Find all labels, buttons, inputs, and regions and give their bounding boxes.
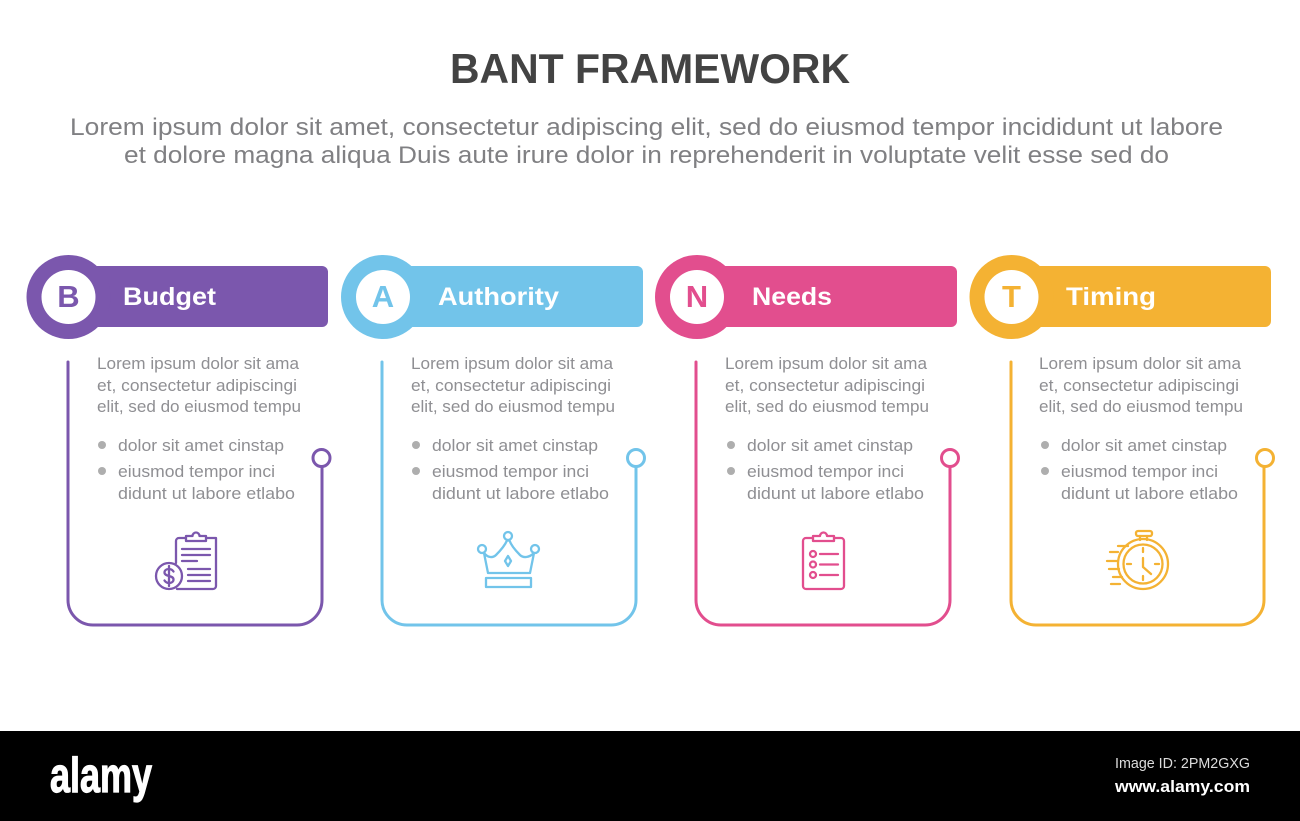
needs header bbox=[655, 255, 957, 339]
website: www.alamy.com bbox=[1114, 778, 1250, 796]
footer: watermark bar bbox=[0, 731, 1300, 821]
budget description: et, consectetur adipiscingi bbox=[97, 377, 297, 395]
needs description bbox=[725, 355, 929, 416]
timing header bbox=[970, 255, 1271, 339]
timing outline with end marker bbox=[1011, 362, 1274, 625]
timing bullet list: dolor sit amet cinstap bbox=[1061, 437, 1227, 455]
icon: clipboard with dollar coin bbox=[156, 533, 216, 589]
authority description bbox=[411, 355, 615, 416]
authority header bbox=[341, 255, 643, 339]
timing description: et, consectetur adipiscingi bbox=[1039, 377, 1239, 395]
authority bullet list bbox=[412, 437, 609, 503]
needs header: Needs bbox=[752, 283, 832, 311]
needs bullet list bbox=[727, 437, 924, 503]
icon: checklist clipboard bbox=[803, 533, 844, 589]
needs outline with end marker bbox=[696, 362, 958, 625]
title: BANT FRAMEWORK bbox=[450, 45, 850, 92]
budget header: Budget bbox=[123, 283, 217, 311]
budget bullet list bbox=[98, 437, 295, 503]
timing header: Timing bbox=[1066, 283, 1156, 311]
subtitle text block bbox=[70, 114, 1223, 169]
budget header: B bbox=[57, 279, 80, 314]
needs bullet list: dolor sit amet cinstap bbox=[747, 437, 913, 455]
timing bullet list bbox=[1041, 437, 1238, 503]
budget description: Lorem ipsum dolor sit ama bbox=[97, 355, 300, 373]
needs header: N bbox=[686, 279, 708, 314]
authority header: Authority bbox=[438, 283, 559, 311]
timing bullet list: didunt ut labore etlabo bbox=[1061, 485, 1238, 503]
panel: authority bbox=[341, 255, 644, 625]
authority bullet list: dolor sit amet cinstap bbox=[432, 437, 598, 455]
needs description: et, consectetur adipiscingi bbox=[725, 377, 925, 395]
authority bullet list: didunt ut labore etlabo bbox=[432, 485, 609, 503]
budget bullet list: didunt ut labore etlabo bbox=[118, 485, 295, 503]
authority header: A bbox=[372, 279, 394, 314]
budget header bbox=[26, 255, 328, 339]
authority description: Lorem ipsum dolor sit ama bbox=[411, 355, 614, 373]
subtitle text block: et dolore magna aliqua Duis aute irure dolor in reprehenderit in voluptate velit esse sed do bbox=[124, 142, 1169, 169]
needs description: Lorem ipsum dolor sit ama bbox=[725, 355, 928, 373]
image id: Image ID: 2PM2GXG bbox=[1115, 755, 1250, 772]
needs bullet list: didunt ut labore etlabo bbox=[747, 485, 924, 503]
panel: budget bbox=[26, 255, 330, 625]
budget description bbox=[97, 355, 301, 416]
panel: needs bbox=[655, 255, 958, 625]
authority description: et, consectetur adipiscingi bbox=[411, 377, 611, 395]
budget description: elit, sed do eiusmod tempu bbox=[97, 398, 301, 416]
needs bullet list: eiusmod tempor inci bbox=[747, 463, 904, 481]
panel: timing bbox=[970, 255, 1274, 625]
authority description: elit, sed do eiusmod tempu bbox=[411, 398, 615, 416]
authority bullet list: eiusmod tempor inci bbox=[432, 463, 589, 481]
budget bullet list: dolor sit amet cinstap bbox=[118, 437, 284, 455]
timing header: T bbox=[1002, 279, 1021, 314]
timing bullet list: eiusmod tempor inci bbox=[1061, 463, 1218, 481]
subtitle text block: Lorem ipsum dolor sit amet, consectetur adipiscing elit, sed do eiusmod tempor incididunt ut labore bbox=[70, 114, 1223, 141]
timing description: Lorem ipsum dolor sit ama bbox=[1039, 355, 1242, 373]
icon: crown bbox=[478, 532, 539, 587]
budget outline with end marker bbox=[68, 362, 330, 625]
alamy logo wordmark: alamy bbox=[50, 749, 152, 803]
icon: stopwatch bbox=[1107, 531, 1168, 589]
timing description bbox=[1039, 355, 1243, 416]
authority outline with end marker bbox=[382, 362, 644, 625]
budget bullet list: eiusmod tempor inci bbox=[118, 463, 275, 481]
needs description: elit, sed do eiusmod tempu bbox=[725, 398, 929, 416]
timing description: elit, sed do eiusmod tempu bbox=[1039, 398, 1243, 416]
